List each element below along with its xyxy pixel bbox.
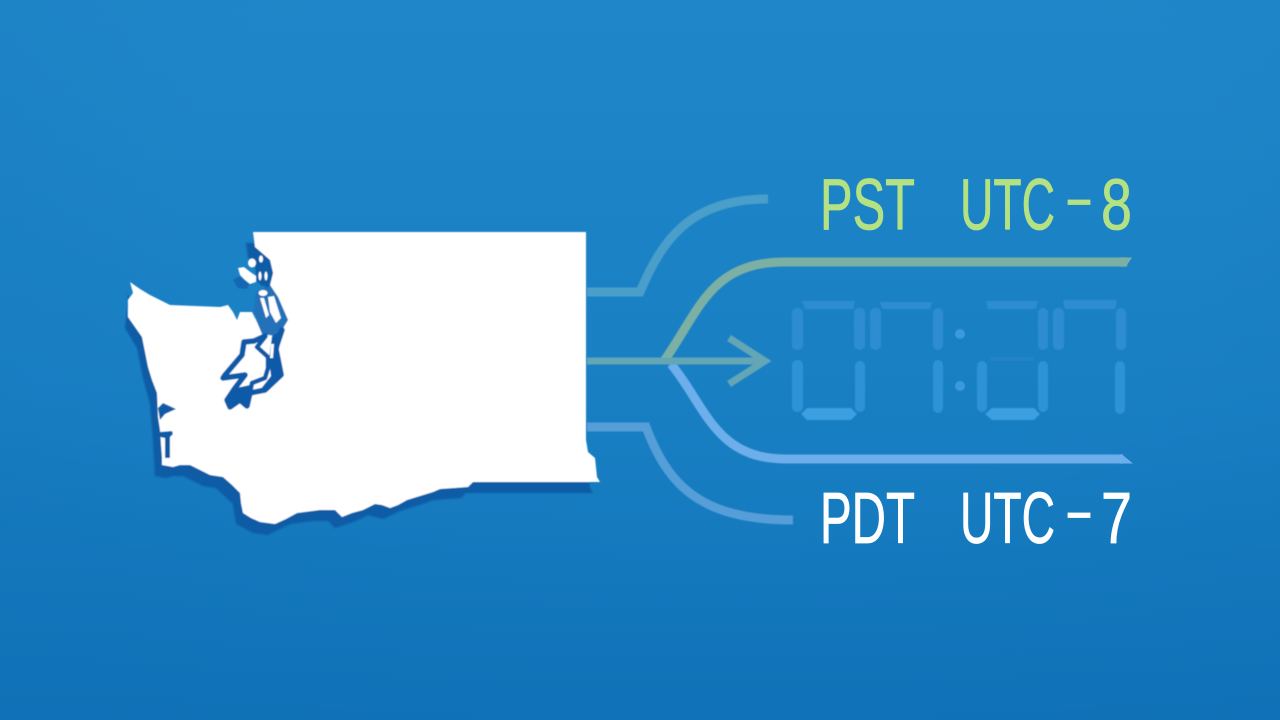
map: Willapa Bay bbox=[160, 431, 173, 458]
label: PDT UTC-7: PDT bbox=[820, 479, 915, 559]
map: east Puget Sound water bbox=[260, 330, 284, 391]
arrow: centre bbox=[587, 338, 765, 384]
label: PDT UTC-7: UTC bbox=[960, 479, 1055, 559]
label: PDT UTC-7 bbox=[820, 479, 1132, 559]
line: upper faint branch to PST bbox=[587, 199, 768, 292]
digit 7 bbox=[870, 302, 943, 413]
digital clock 07:27 bbox=[792, 300, 1126, 420]
map: dark shore near islands bbox=[255, 254, 273, 286]
map: dark patch under islands bbox=[233, 276, 250, 289]
map: southern inlets bbox=[226, 385, 252, 408]
map: Washington state bbox=[125, 232, 600, 535]
map shadow bbox=[125, 243, 593, 535]
map land bbox=[128, 232, 600, 524]
label: PST UTC-8 bbox=[820, 166, 1132, 246]
map: Hood Canal and Puget Sound shoreline bbox=[223, 330, 282, 407]
digit 2 bbox=[977, 301, 1048, 420]
connector lines bbox=[587, 199, 1127, 520]
map: Vashon sliver bbox=[270, 344, 274, 358]
line end: blue tip bbox=[1120, 454, 1133, 464]
line: blue branch bbox=[671, 364, 1123, 459]
digit 7 second bbox=[1053, 300, 1126, 414]
digit 0 bbox=[792, 301, 865, 420]
colon bbox=[955, 329, 965, 391]
map: Whidbey and Camano islands bbox=[258, 290, 281, 323]
line: green branch bbox=[664, 262, 1127, 361]
map: north sound water bbox=[254, 286, 288, 336]
map: Grays Harbor bbox=[158, 403, 176, 420]
label: PST UTC-8: 8 bbox=[1101, 166, 1132, 246]
map: San Juan islands bbox=[238, 256, 268, 284]
label: PDT UTC-7: 7 bbox=[1101, 479, 1132, 559]
label: PST UTC-8: UTC bbox=[960, 166, 1055, 246]
line: lower faint branch to PDT bbox=[587, 427, 793, 520]
label: PST UTC-8: PST bbox=[820, 166, 915, 246]
line end: green tip bbox=[1120, 258, 1132, 266]
